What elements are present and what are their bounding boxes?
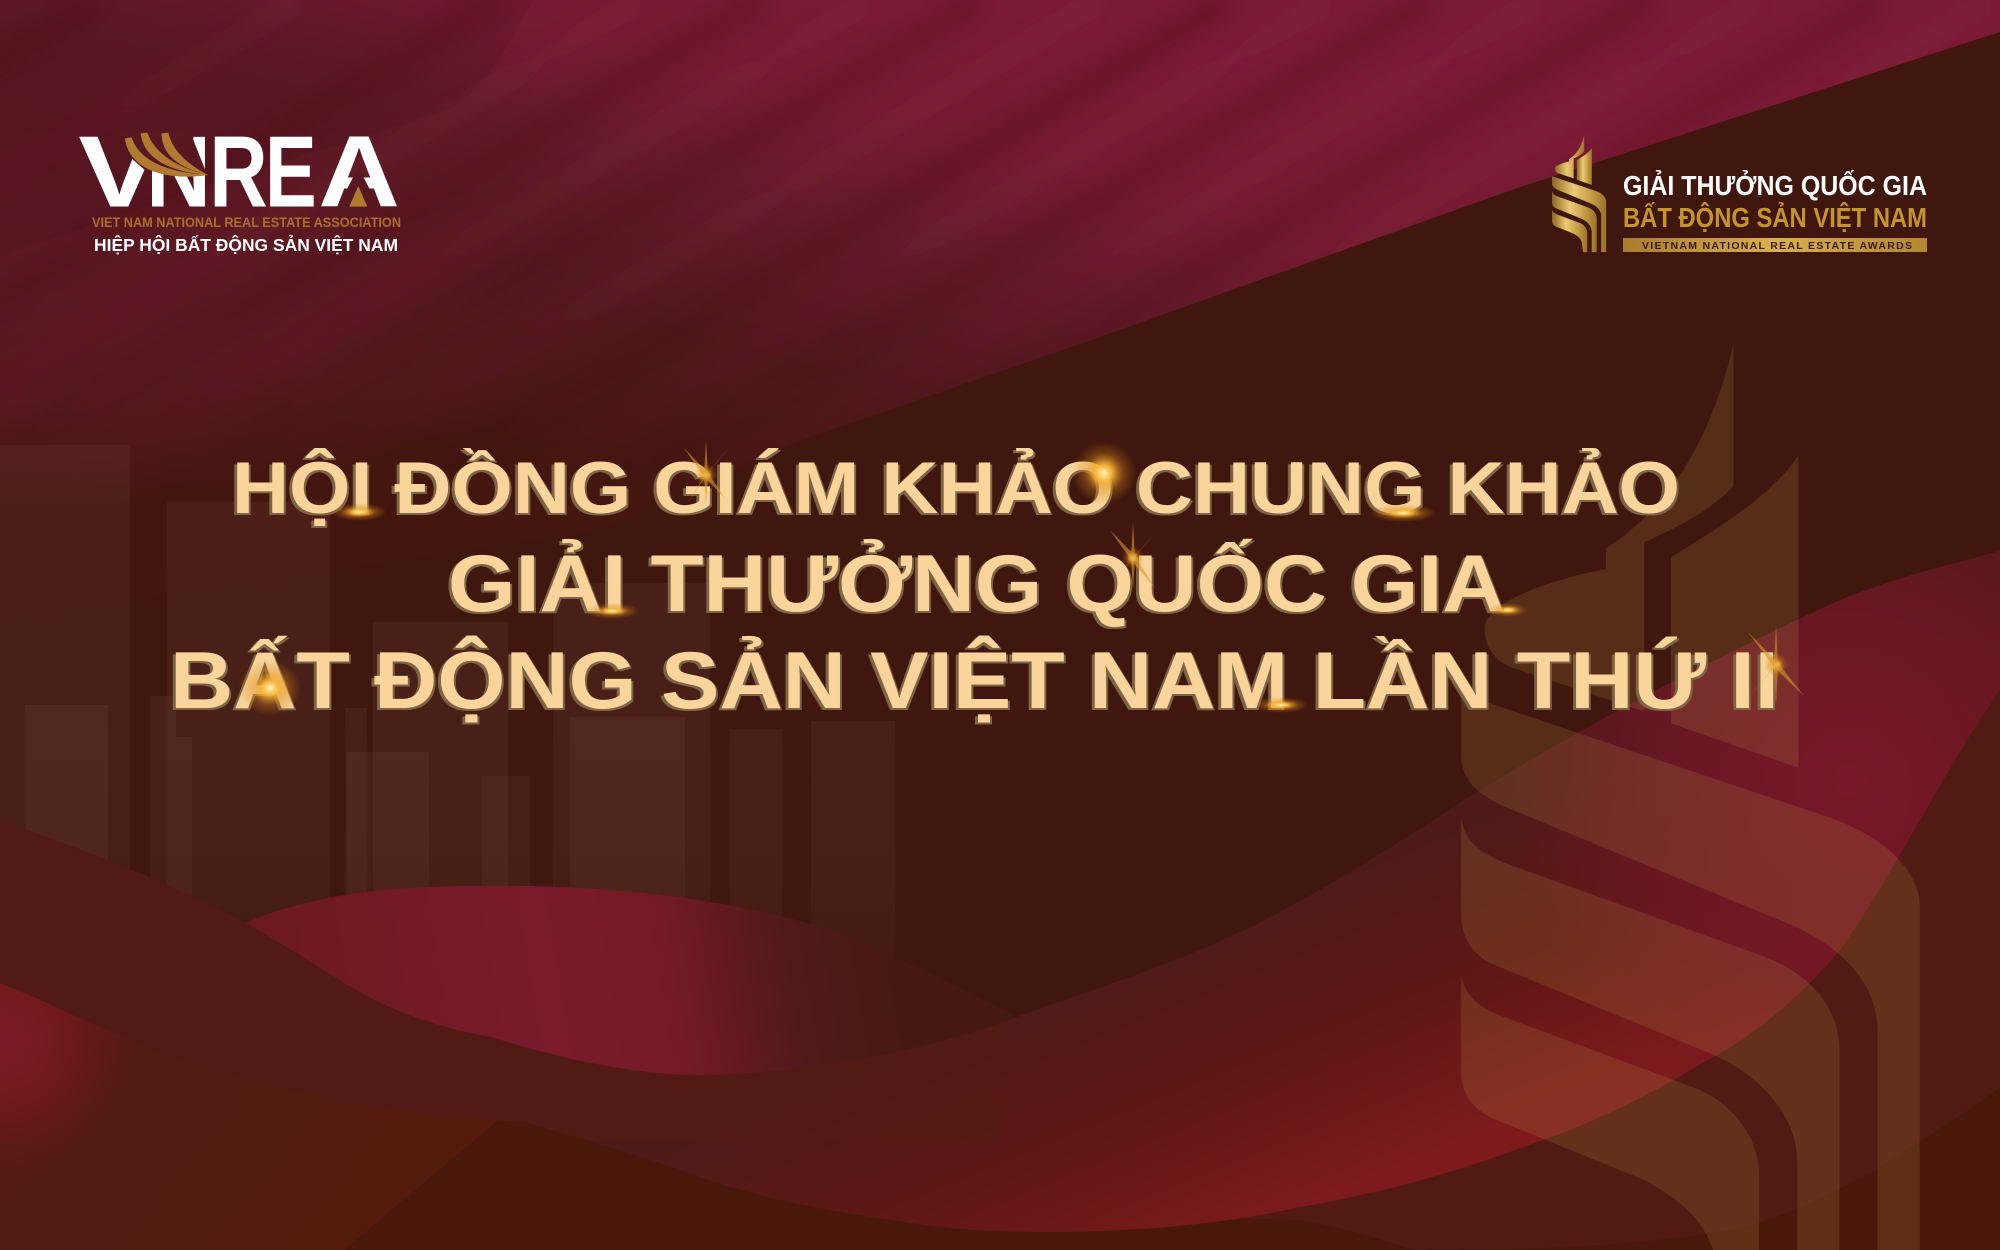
city skyline silhouettes [0, 445, 895, 1106]
title [170, 448, 1779, 726]
award name line two: BẤT ĐỘNG SẢN VIỆT NAM [1623, 201, 1927, 233]
logo: national real estate awards [1552, 135, 1927, 252]
title line two: GIẢI THƯỞNG QUỐC GIA [448, 538, 1505, 629]
title line three: BẤT ĐỘNG SẢN VIỆT NAM LẦN THỨ II [170, 635, 1779, 726]
logo English name: VIET NAM NATIONAL REAL ESTATE ASSOCIATION [92, 214, 401, 230]
top red drape [0, 0, 2000, 482]
award English ribbon: VIETNAM NATIONAL REAL ESTATE AWARDS [1642, 240, 1912, 252]
logo letters: E [265, 117, 317, 229]
logo letters [78, 117, 400, 229]
lower left wave [0, 983, 498, 1250]
title line one: HỘI ĐỒNG GIÁM KHẢO CHUNG KHẢO [232, 448, 1680, 529]
left red glow [0, 983, 150, 1180]
logo letters: A [318, 117, 400, 229]
bottom dark wedge [344, 1000, 2000, 1250]
logo letters: N [146, 117, 211, 229]
icon: golden tower emblem [1552, 135, 1606, 252]
golden sparkles [238, 440, 1815, 716]
right lower soft layer [1100, 650, 2000, 1250]
logo letters: V [78, 117, 160, 229]
logo Vietnamese name: HIỆP HỘI BẤT ĐỘNG SẢN VIỆT NAM [94, 234, 398, 255]
logo: VNREA [78, 117, 401, 255]
watermark award emblem [1461, 344, 1920, 1250]
logo letters: R [209, 117, 268, 229]
bright crimson wave [244, 886, 1017, 1090]
award name line one: GIẢI THƯỞNG QUỐC GIA [1623, 169, 1927, 201]
sweeping maroon wave [0, 551, 2000, 1232]
